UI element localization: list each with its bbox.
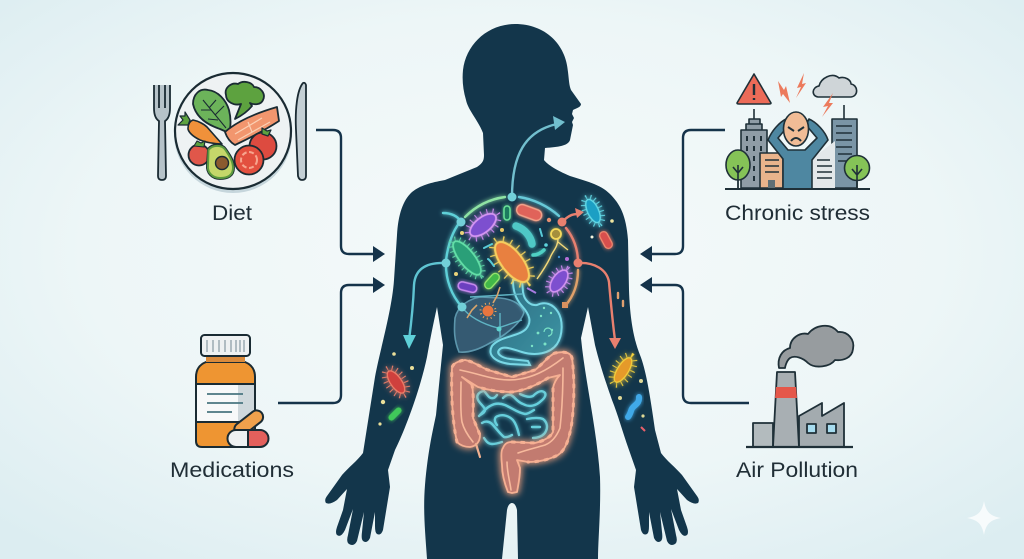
- microbe specks: [454, 218, 614, 308]
- specks: [378, 352, 414, 426]
- small intestine: [477, 391, 547, 444]
- colon scallops: [452, 352, 574, 462]
- beige lines: [765, 160, 779, 172]
- appendix: [476, 444, 480, 457]
- carrot top: [178, 112, 190, 125]
- colon body: [452, 352, 574, 493]
- factory: [799, 403, 844, 447]
- microbe: purple rod: [457, 281, 478, 293]
- salmon: [225, 107, 279, 145]
- arrow: diet to body: [316, 130, 385, 262]
- arrow: medications to body: [278, 277, 385, 403]
- bottle body: [196, 362, 255, 447]
- panel: microbe circle: [403, 116, 621, 349]
- stomach speckles: [531, 307, 553, 347]
- fruit leaf: [194, 141, 205, 147]
- stomach: [491, 280, 562, 365]
- microbe: salmon rod: [515, 203, 543, 222]
- ground: [725, 188, 870, 190]
- spinach: [193, 90, 230, 133]
- colon glow: [452, 352, 574, 493]
- icon: chronic stress: [725, 73, 870, 189]
- large intestine: [452, 352, 574, 493]
- bottle neck: [206, 356, 245, 362]
- specks: [618, 293, 645, 431]
- label lines: [207, 394, 243, 412]
- ground: [746, 446, 853, 448]
- panel: right arm microbes: [606, 293, 645, 431]
- tomato slice seeds: [241, 152, 257, 168]
- windows: [807, 424, 836, 433]
- right building lines: [836, 126, 852, 161]
- liver microbes: [467, 287, 502, 332]
- icon: medications: [196, 335, 268, 447]
- knife: [296, 83, 306, 180]
- liver: [454, 297, 524, 352]
- label: Air Pollution: Air Pollution: [736, 459, 858, 482]
- left tree trunk: [737, 170, 739, 188]
- network nodes: [442, 192, 582, 312]
- microbe: blue spiky: [579, 194, 607, 228]
- panel: gut organs: [452, 280, 574, 493]
- microbe: green rod: [387, 406, 403, 422]
- avocado: [207, 144, 234, 179]
- tomato slice: [234, 146, 264, 174]
- warning mark: [753, 84, 755, 100]
- bottle cap: [201, 335, 250, 356]
- arrow: chronic stress to body: [640, 130, 725, 262]
- left building: [741, 109, 767, 188]
- tomato: [250, 132, 276, 160]
- microbe: yellow flagellate: [537, 229, 568, 279]
- microbe: blue rod: [628, 397, 639, 417]
- plate: [175, 73, 291, 189]
- warning sign: [737, 74, 771, 104]
- cloud: [813, 76, 857, 97]
- microbe: purple lower spiky: [543, 264, 575, 298]
- fork: [154, 85, 170, 180]
- avocado pit: [216, 156, 228, 170]
- human silhouette: [325, 24, 699, 559]
- microbe: orange large: [484, 232, 540, 292]
- horizontal capsule: [228, 430, 248, 447]
- arrow: to left arm: [403, 263, 446, 349]
- white building lines: [817, 160, 832, 178]
- tomato stem: [262, 128, 271, 136]
- microbe: green small rod: [504, 206, 510, 220]
- microbe: teal rod: [516, 226, 532, 244]
- right building: [832, 105, 857, 188]
- avocado skin: [208, 146, 233, 178]
- microbe: green rod: [483, 272, 501, 290]
- lightning bolts: [778, 73, 806, 103]
- liver vessels: [462, 294, 522, 337]
- icon: diet plate: [154, 73, 306, 193]
- left building windows: [747, 136, 761, 181]
- microbe: yellow spiky: [606, 351, 640, 389]
- cloud lightning: [822, 93, 833, 117]
- panel: left arm microbes: [378, 352, 414, 426]
- colon highlights: [460, 358, 563, 490]
- spinach veins: [201, 100, 226, 128]
- microbe: green spiky: [445, 234, 489, 282]
- white building: [813, 141, 835, 188]
- diagonal capsule: [232, 408, 266, 438]
- broccoli: [226, 82, 264, 119]
- beige door: [768, 180, 775, 188]
- microbe: purple spiky: [463, 206, 503, 244]
- red fruit: [188, 144, 210, 166]
- salmon stripes: [235, 118, 270, 140]
- label shade: [238, 385, 254, 421]
- microbe: red spiky: [379, 364, 413, 400]
- plate shadow: [174, 75, 292, 193]
- person head: [784, 112, 808, 146]
- label: Medications: Medications: [170, 459, 294, 482]
- cap ridges: [207, 340, 244, 352]
- circle arcs: [443, 197, 578, 307]
- person body: [768, 119, 828, 189]
- arrow: to right arm: [578, 263, 621, 349]
- arrow: to upper right microbe: [562, 208, 584, 222]
- arrow: to mouth: [512, 116, 565, 197]
- right tree branches: [852, 165, 862, 180]
- bottle label: [196, 384, 255, 422]
- left tree crown: [726, 150, 750, 180]
- microbe: red rod: [598, 230, 614, 250]
- chimney: [773, 372, 799, 447]
- right tree trunk: [856, 178, 858, 188]
- microbe: small teal rod: [533, 250, 544, 255]
- capsule red half: [248, 430, 268, 447]
- chimney band: [775, 387, 797, 398]
- label: Diet: Diet: [212, 202, 252, 225]
- right tree crown: [844, 156, 870, 180]
- face: [788, 127, 804, 141]
- beige building: [760, 153, 783, 188]
- icon: air pollution: [746, 326, 853, 447]
- carrot: [188, 120, 222, 144]
- left tree branches: [733, 165, 743, 180]
- icon: sparkle: [967, 501, 1001, 535]
- label: Chronic stress: Chronic stress: [725, 202, 870, 225]
- arrow: air pollution to body: [640, 277, 749, 403]
- side building: [753, 423, 773, 447]
- smoke: [779, 326, 853, 368]
